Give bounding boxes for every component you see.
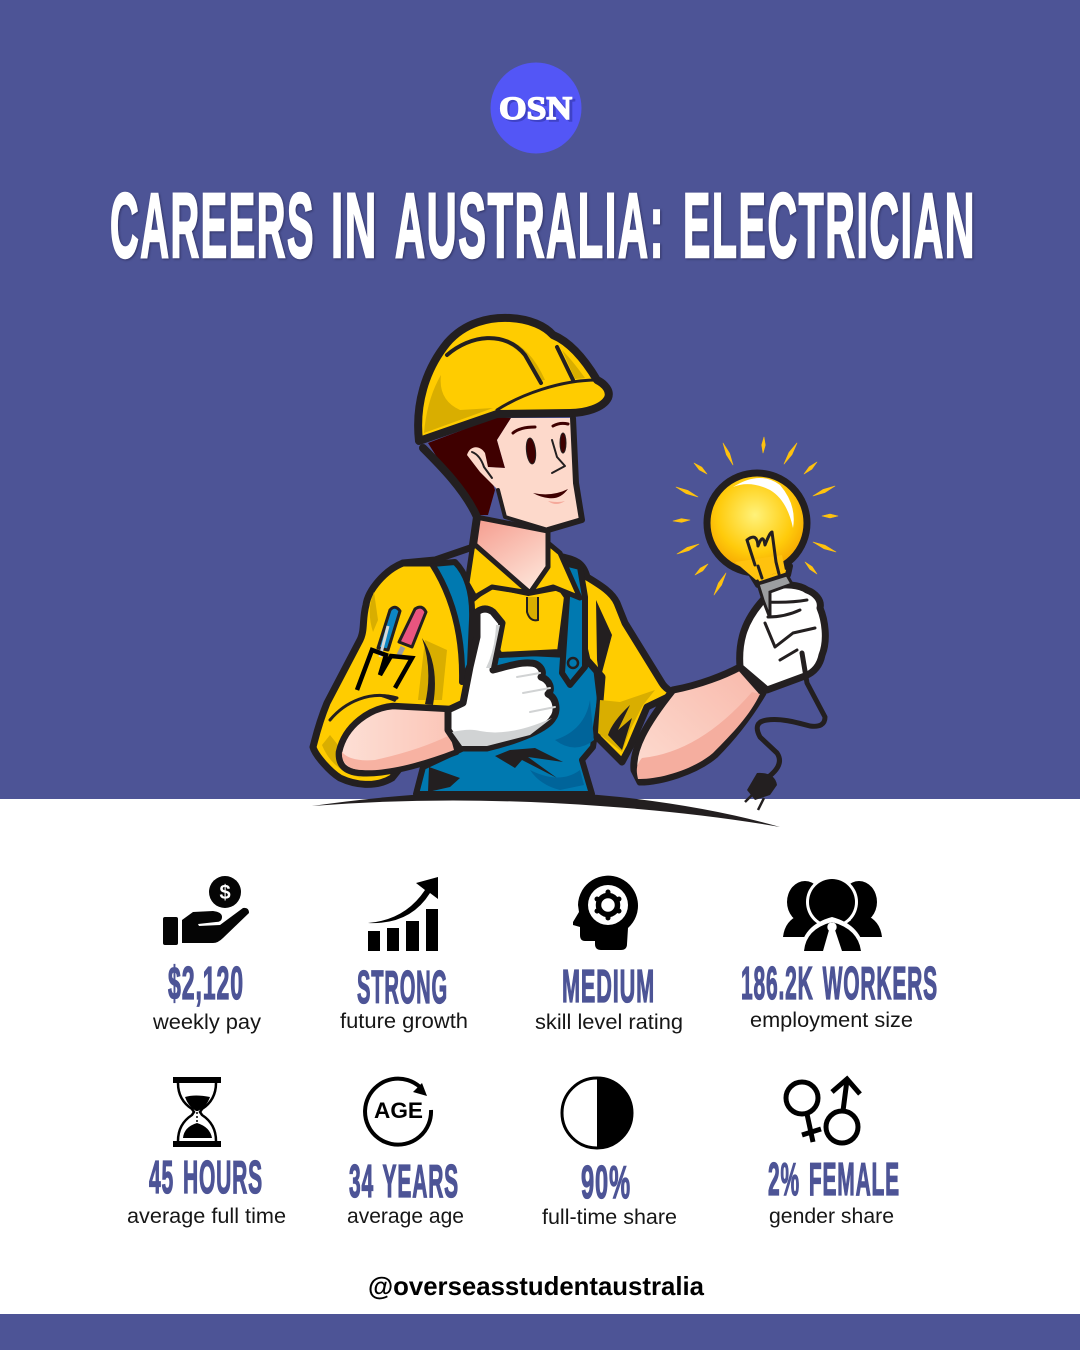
label: weekly pay (152, 1011, 262, 1034)
label: average age (347, 1205, 464, 1228)
helmet brim (497, 380, 597, 410)
icon: age cycle (365, 1079, 431, 1145)
logo: OSN badge (490, 62, 582, 154)
plug (745, 773, 777, 810)
stat: average full time: 45 HOURS (149, 1151, 263, 1203)
left sleeve shade (322, 592, 447, 778)
value: $2,120 (168, 957, 244, 1009)
nose (552, 440, 565, 473)
background: upper purple panel (0, 0, 1080, 799)
shoulder line (403, 548, 470, 563)
left forearm shade (342, 735, 454, 770)
eyes (525, 438, 537, 464)
light bulb (707, 473, 807, 618)
title: CAREERS (110, 175, 315, 277)
overalls body (416, 650, 600, 794)
power cord (757, 653, 825, 778)
label: full-time share (542, 1206, 677, 1229)
label: skill level rating (535, 1011, 683, 1034)
left sleeve folds (378, 638, 435, 705)
right glove (740, 585, 825, 690)
bulb neck (750, 566, 790, 585)
glove shading (452, 625, 552, 746)
lower lip (548, 501, 565, 504)
label: employment size (750, 1009, 913, 1032)
stat: full-time share (542, 1077, 677, 1229)
highlight (733, 478, 794, 528)
shirt centre (468, 585, 567, 655)
stat: future growth (340, 877, 468, 1033)
glove finger lines (517, 673, 555, 712)
logo: OSN badge: OSN (499, 91, 572, 127)
filament (747, 532, 779, 578)
stat: future growth: STRONG (357, 961, 448, 1013)
icon: half-filled circle (562, 1077, 633, 1149)
bulb base (758, 575, 792, 618)
right sleeve shade (598, 690, 655, 752)
back of head outline (423, 448, 477, 545)
stat: gender share (768, 1079, 900, 1228)
thumbs-up glove (448, 609, 556, 748)
icon: hand with coin: $ (219, 882, 231, 904)
face (467, 418, 582, 530)
head (423, 417, 582, 545)
mouth (533, 489, 568, 498)
left forearm (339, 706, 456, 773)
illustration: electrician with light bulb (312, 318, 838, 827)
stat: employment size (741, 876, 938, 1032)
label: future growth (340, 1010, 468, 1033)
blue screwdriver (378, 607, 400, 650)
helmet ridges (447, 338, 573, 383)
icon: gender symbols (786, 1079, 860, 1143)
right forearm (634, 667, 763, 782)
bulb glass (707, 473, 807, 573)
neck (473, 517, 548, 593)
overalls shadows (428, 748, 563, 792)
stat: weekly pay (152, 876, 262, 1034)
stat: average age (347, 1079, 464, 1228)
right strap (560, 562, 585, 685)
stat: skill level (535, 876, 683, 1034)
logo: OSN badge: OSN (501, 93, 575, 129)
glove fingers (765, 600, 815, 660)
ear detail (472, 452, 492, 478)
icon: growth chart (368, 877, 438, 951)
jaw line (498, 490, 548, 530)
icon: three people (783, 876, 882, 953)
left sleeve (313, 563, 472, 784)
shirt placket (527, 597, 538, 620)
value: 90% (581, 1156, 631, 1208)
face outline (548, 418, 582, 530)
icon: age cycle: AGE (374, 1098, 423, 1123)
helmet shade (424, 338, 585, 433)
bulb rays (673, 437, 838, 595)
pocket holder (357, 650, 412, 690)
strap button (568, 658, 578, 668)
right sleeve folds (596, 600, 632, 750)
title (110, 175, 976, 277)
helmet (418, 318, 609, 441)
eyebrows (513, 423, 568, 433)
left strap (432, 562, 472, 682)
stat: skill level: MEDIUM (562, 960, 655, 1012)
hair (428, 417, 511, 515)
label: gender share (769, 1205, 894, 1228)
icon: head with gear (573, 876, 638, 950)
text: 34 YEARS (349, 1155, 459, 1207)
footer handle: @overseasstudentaustralia (368, 1271, 705, 1301)
title: AUSTRALIA: (395, 175, 665, 277)
text: 2% FEMALE (768, 1153, 900, 1205)
stat: average full time (127, 1077, 286, 1228)
cuff fold line (330, 695, 397, 720)
icon: hand with coin (163, 876, 249, 945)
collar (467, 543, 580, 598)
forearm shade (637, 692, 760, 779)
icon: hourglass (173, 1077, 221, 1147)
title: IN (331, 175, 378, 277)
label: average full time (127, 1205, 286, 1228)
ground swoosh (312, 791, 780, 827)
pink screwdriver (399, 607, 426, 647)
right sleeve (563, 557, 672, 762)
tools in pocket (357, 607, 426, 690)
background: bottom purple band (0, 1314, 1080, 1350)
